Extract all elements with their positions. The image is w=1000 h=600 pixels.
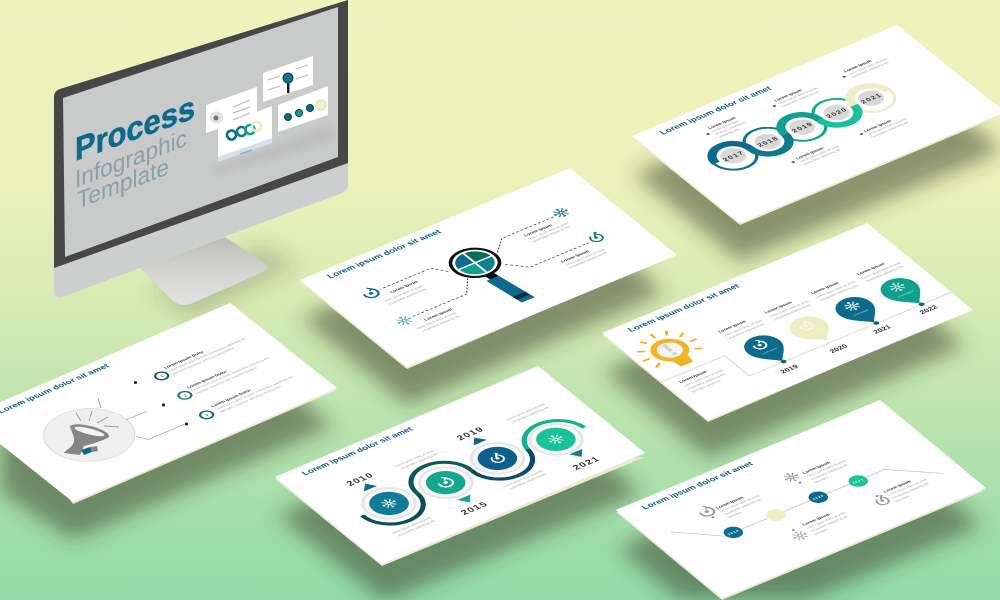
label 2 (801, 507, 855, 536)
label 2: consectetur adipiscing elit. (421, 314, 462, 332)
label 1: Lorem Ipsum (715, 495, 745, 510)
slide: megaphone (0, 303, 337, 502)
label 2 (410, 307, 462, 333)
caption 3: consectetur adipiscing elit. (819, 284, 859, 302)
label 1: Lorem ipsum dolor sit amet, (382, 284, 424, 303)
slide: timeline rings (632, 25, 1000, 223)
monitor body (54, 0, 348, 297)
year labels (777, 304, 941, 375)
year labels: 2022 (917, 304, 940, 315)
milestone line (671, 437, 943, 568)
label 4: Lorem ipsum dolor sit amet, (564, 248, 607, 266)
caption 2: Lorem ipsum dolor sit amet, (768, 299, 810, 318)
connected ring chain (700, 79, 904, 175)
icon: megaphone (64, 398, 119, 455)
wave text 4: Lorem ipsum dolor sit amet, (502, 469, 544, 488)
note 1: adipiscing elit. (718, 128, 741, 138)
screen title: Process: Process (75, 89, 195, 169)
year 2019: 2019 (791, 122, 815, 134)
icon: gear (550, 206, 572, 219)
step 3 badge: 3 (205, 414, 210, 417)
year 2021 (853, 88, 889, 109)
label 2: Lorem Ipsum (801, 512, 831, 526)
slide title: Lorem ipsum dolor sit amet (625, 282, 742, 333)
note 5: consectetur adipiscing elit. (870, 121, 910, 139)
desktop monitor (54, 0, 348, 305)
label 4: Lorem Ipsum (560, 249, 590, 263)
note 4: consectetur adipiscing elit. (802, 148, 842, 166)
pin 2020: Lorem Ipsum (805, 328, 824, 337)
dashed connectors (378, 216, 589, 317)
year labels: 2019 (778, 363, 800, 375)
label 2: consectetur adipiscing elit. (809, 515, 849, 533)
caption 1 (717, 314, 768, 340)
note 4: Lorem Ipsum (795, 146, 825, 160)
step 3 badge (198, 410, 216, 420)
year labels: 2015 (459, 500, 490, 516)
label 4: Sed diam. (894, 494, 911, 503)
year 2017 (715, 145, 752, 167)
label 3 (801, 455, 855, 484)
megaphone circle (26, 398, 153, 472)
label 1: Sed diam. (727, 511, 744, 519)
milestone 3: 2020 (812, 494, 825, 501)
caption 1: Lorem Ipsum (717, 319, 747, 333)
note 2 (767, 83, 823, 110)
caption 3: Lorem Ipsum (810, 281, 840, 295)
slide background (616, 400, 986, 598)
note 5: Lorem Ipsum (862, 119, 893, 133)
note 3: consectetur adipiscing elit. (850, 61, 890, 79)
caption 1: consectetur adipiscing elit. (726, 322, 766, 340)
milestone 2021 (518, 417, 594, 462)
label 1: consectetur adipiscing elit. (388, 287, 428, 305)
slide background (602, 223, 973, 420)
year labels: 2010 (344, 471, 376, 487)
note 2: Lorem Ipsum (773, 88, 803, 102)
slide background (275, 366, 645, 564)
label 2: Lorem ipsum dolor sit amet, (415, 311, 458, 330)
note 2: Lorem ipsum dolor sit amet, (777, 86, 819, 105)
year labels: 2021 (871, 323, 893, 335)
icon: cycle (359, 286, 381, 299)
icon: target (586, 231, 605, 243)
caption 4: Lorem Ipsum (856, 262, 886, 276)
step 2 text: Lorem Ipsum Dolor (186, 369, 228, 389)
pin 2021 (828, 293, 889, 330)
connector dots (134, 381, 188, 426)
wave text 3: Lorem ipsum dolor sit amet, (505, 402, 547, 421)
note 3: Lorem Ipsum (843, 59, 873, 73)
pin 2021: Lorem Ipsum (851, 308, 870, 317)
wave text 1: consectetur adipiscing elit. (400, 452, 439, 470)
mini slides on screen (206, 56, 335, 175)
milestone 2019 (459, 436, 535, 481)
label 4 (882, 474, 936, 503)
wave text 1: Lorem ipsum dolor sit amet, (394, 449, 436, 468)
monitor screen (63, 7, 338, 257)
year labels (344, 403, 602, 540)
label 1: Lorem Ipsum (389, 280, 420, 294)
text box label: Lorem Ipsum (678, 370, 708, 384)
year 2019 (784, 116, 820, 138)
slide: light bulb and pins (602, 223, 973, 420)
step 3 text: Lorem ipsum dolor sit amet, consectetur adipiscing elit. (215, 375, 295, 411)
step 2 text: Sed diam nonummy nibh euismod tincidunt. (194, 366, 259, 395)
caption 2: consectetur adipiscing elit. (772, 303, 812, 321)
milestone 3 (805, 489, 832, 505)
pin 2019: Lorem Ipsum (760, 346, 779, 356)
pin 2022 (873, 274, 934, 311)
step 2 badge: 2 (183, 394, 188, 397)
icon 2 (789, 529, 811, 542)
step 2 badge (176, 390, 194, 401)
label 3: Lorem ipsum dolor sit amet, (527, 222, 570, 240)
slide title: Lorem ipsum dolor sit amet (299, 425, 415, 477)
step 1 text: Lorem Ipsum Dolor (163, 350, 205, 369)
caption 3: Lorem ipsum dolor sit amet, (815, 280, 857, 299)
monitor bezel (54, 0, 348, 268)
slide: wave timeline (275, 366, 645, 564)
slide: line milestones (616, 400, 986, 598)
label 3: consectetur adipiscing elit. (810, 463, 850, 481)
wave text 2: Lorem ipsum dolor sit amet, (391, 516, 433, 535)
step 1 text: Lorem ipsum dolor sit amet, consectetur adipiscing elit. (168, 337, 248, 372)
monitor stand (140, 237, 268, 305)
label 3: Lorem ipsum dolor sit amet, (806, 459, 848, 478)
slide title: Lorem ipsum dolor sit amet (639, 460, 755, 511)
icon: light bulb (624, 323, 714, 375)
stem dots (711, 463, 879, 550)
text box label (678, 364, 732, 393)
icon 1 (695, 505, 717, 518)
label 2: Sed diam. (813, 527, 830, 536)
label 3: consectetur adipiscing elit. (531, 225, 571, 243)
step 1 badge: 1 (160, 375, 165, 378)
caption 4: Lorem ipsum dolor sit amet, (861, 261, 903, 280)
text box label: Sed diam nonummy. (690, 379, 722, 393)
caption 2 (763, 295, 814, 321)
magnifier handle (482, 270, 535, 305)
caption 2: Lorem Ipsum (763, 300, 793, 314)
icon: flake (393, 314, 415, 327)
slide title: Lorem ipsum dolor sit amet (657, 84, 774, 136)
note 1 (701, 114, 751, 141)
label 3: Lorem Ipsum (523, 223, 553, 237)
label 2: Lorem Ipsum (423, 307, 454, 321)
timeline path (662, 272, 951, 402)
step 3 text: Lorem Ipsum Dolor (210, 388, 252, 408)
step 1 badge (153, 371, 171, 381)
year 2018 (749, 131, 786, 152)
label 4: consectetur adipiscing elit. (568, 251, 608, 269)
note 2: consectetur adipiscing elit. (781, 90, 821, 108)
note 5 (857, 114, 912, 141)
label 1 (715, 490, 768, 519)
note 3 (837, 54, 892, 81)
note 1: Lorem ipsum dolor (711, 119, 741, 133)
year 2020 (818, 102, 855, 123)
year 2020: 2020 (825, 107, 850, 119)
caption 4: consectetur adipiscing elit. (865, 265, 905, 283)
note 3: Lorem ipsum dolor sit amet, (847, 57, 889, 76)
milestone 4 (845, 473, 872, 489)
wave line (344, 409, 601, 533)
wave text 3: consectetur adipiscing elit. (511, 405, 551, 423)
caption 4 (856, 257, 907, 283)
pin 2022: Lorem Ipsum (896, 289, 915, 298)
screen subtitle: Template: Template (77, 154, 169, 215)
note 5: Lorem ipsum dolor sit amet, (867, 117, 909, 136)
note 4 (789, 141, 844, 168)
caption 1: Lorem ipsum dolor sit amet, (722, 318, 764, 337)
wave text 4: consectetur adipiscing elit. (508, 472, 548, 490)
triangle markers (358, 412, 588, 529)
year 2021: 2021 (860, 93, 884, 105)
note 4: Lorem ipsum dolor sit amet, (799, 144, 841, 163)
pin 2020 (782, 312, 841, 348)
caption 3 (810, 276, 861, 302)
label 3: Lorem Ipsum (801, 460, 832, 475)
slide background (300, 168, 677, 367)
connectors (126, 412, 185, 440)
milestone 1 (720, 524, 747, 540)
milestone 1: 2018 (727, 529, 740, 536)
label 1 (376, 280, 428, 306)
timeline dots (780, 302, 926, 364)
label 4 (560, 244, 610, 269)
step 1 text: Sed diam nonummy nibh euismod tincidunt. (171, 347, 236, 375)
step 3 text: Sed diam nonummy nibh euismod tincidunt. (218, 385, 283, 414)
year 2018: 2018 (756, 136, 781, 148)
year 2017: 2017 (722, 150, 746, 163)
label 4: consectetur adipiscing elit. (890, 482, 930, 500)
milestone 2 (762, 507, 789, 523)
label 4: Lorem ipsum dolor sit amet, (887, 478, 929, 496)
label 1: consectetur adipiscing elit. (723, 498, 763, 516)
label 3 (523, 218, 573, 243)
slide background (0, 303, 337, 502)
label 3: Sed diam. (813, 476, 830, 484)
slide: magnifying glass (300, 168, 677, 367)
pin 2019 (736, 331, 797, 368)
slide title: Lorem ipsum dolor sit amet (325, 228, 443, 280)
milestone 2010 (351, 481, 427, 526)
milestone 2015 (408, 460, 484, 505)
note 1: Lorem Ipsum (707, 116, 737, 130)
icon 4 (872, 494, 891, 506)
year labels: 2019 (454, 425, 486, 442)
milestone 4: 2021 (852, 478, 865, 485)
year labels: 2020 (827, 343, 850, 354)
magnifier lens (441, 243, 509, 283)
note 1: sit amet, consectetur (714, 121, 747, 136)
step 2 text: Lorem ipsum dolor sit amet, consectetur adipiscing elit. (191, 356, 271, 392)
text box label: consectetur adipiscing elit. (687, 373, 727, 390)
slide background (632, 25, 1000, 223)
label 4: Lorem Ipsum (882, 479, 912, 493)
label 1: Lorem ipsum dolor sit amet, (719, 494, 761, 513)
year labels: 2021 (570, 455, 602, 471)
label 2: Lorem ipsum dolor sit amet, (806, 511, 847, 529)
screen subtitle: Infographic: Infographic (75, 125, 187, 194)
icon 3 (781, 471, 802, 484)
text box label: Lorem ipsum dolor sit amet, (683, 369, 725, 387)
wave text 2: consectetur adipiscing elit. (397, 519, 436, 537)
